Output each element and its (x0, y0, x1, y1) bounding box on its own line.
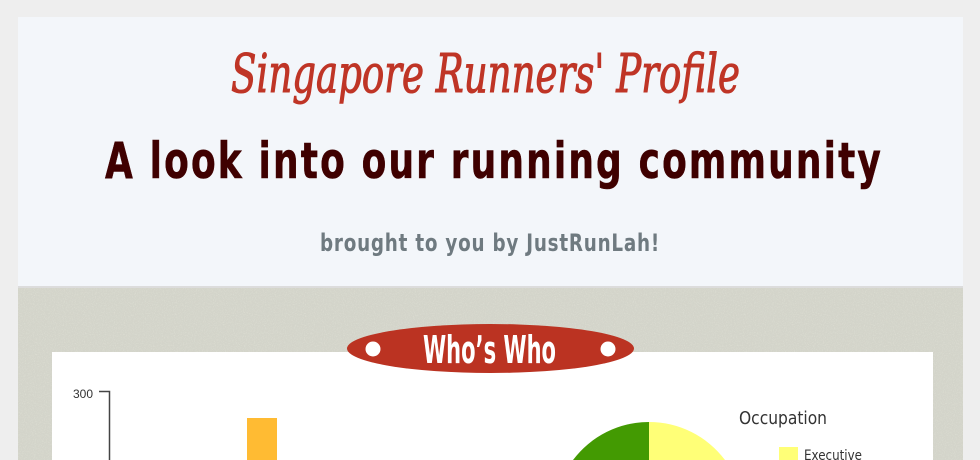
pie chart (573, 422, 725, 460)
pie slice: green (573, 422, 649, 460)
axis label: 300: 300 (73, 387, 93, 401)
legend swatch (779, 447, 798, 460)
panel: who's who section (18, 286, 963, 460)
legend title: Occupation (739, 408, 827, 429)
bar chart (73, 387, 277, 460)
badge heading: Who’s Who (423, 328, 556, 372)
badge dot left (366, 342, 380, 356)
panel: white chart card (52, 352, 933, 460)
byline: brought to you by JustRunLah! (320, 229, 660, 257)
panel: header (18, 17, 963, 287)
title: Singapore Runners' Profile (231, 44, 740, 105)
section badge (347, 324, 634, 373)
badge dot right (600, 342, 616, 356)
legend (739, 408, 862, 460)
bar (247, 418, 277, 460)
pie slice: executive (649, 422, 725, 460)
y axis (99, 392, 110, 460)
